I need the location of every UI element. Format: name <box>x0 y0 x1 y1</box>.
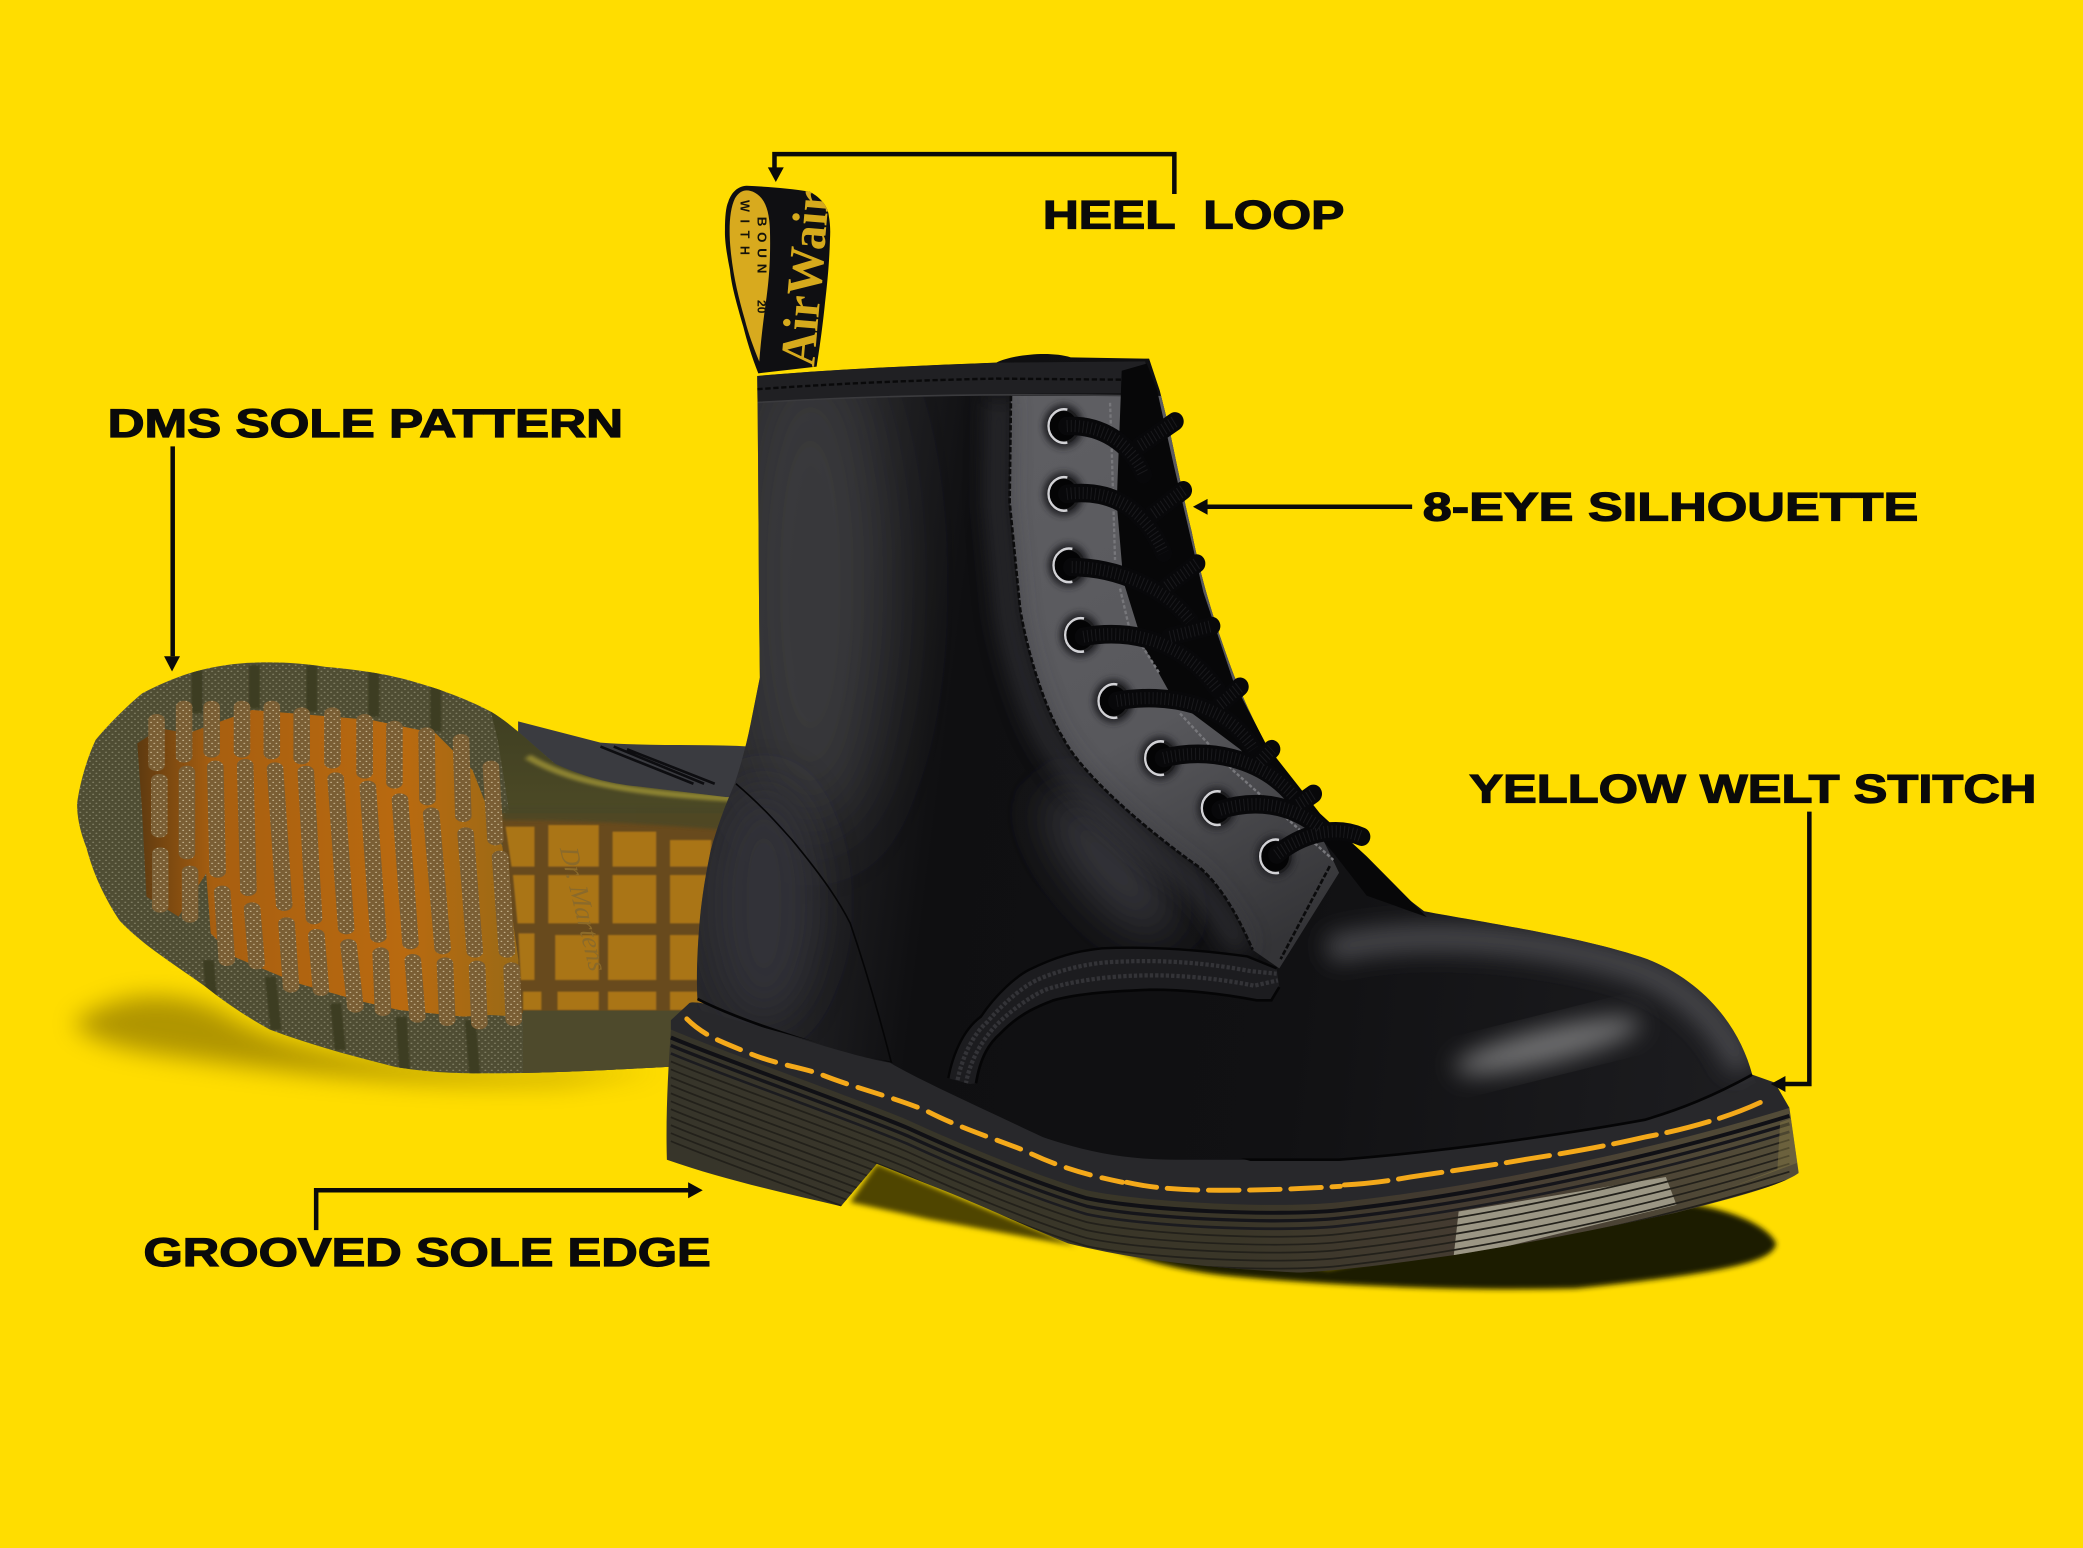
label: 8-eye silhouette: 8-EYE SILHOUETTE <box>1423 486 1918 530</box>
label: DMS sole pattern: DMS SOLE PATTERN <box>108 402 623 446</box>
heel counter highlight <box>711 784 817 1023</box>
triple toe-cap stitching band <box>947 948 1279 1087</box>
welt band <box>671 1002 1789 1205</box>
sole rim dot texture <box>77 662 553 1074</box>
arrow: 8-eye silhouette <box>1193 499 1412 515</box>
arrow: yellow welt stitch <box>1771 812 1809 1092</box>
embossed sole text: Dr. Martens <box>554 844 614 973</box>
inner strap number: 20 <box>754 300 768 314</box>
inner facing stitch <box>1110 403 1333 860</box>
translucent toe edge <box>1735 1119 1798 1186</box>
label: heel loop: HEEL LOOP <box>1043 193 1344 237</box>
inner yellow face <box>730 190 770 362</box>
arrow: grooved sole edge <box>316 1182 703 1230</box>
shadow under sole <box>73 996 664 1083</box>
eyelet facing panel <box>1010 396 1339 968</box>
yellow welt stitch <box>687 1019 1766 1190</box>
back boot behind sole <box>518 721 751 850</box>
dark tread channels <box>197 665 475 1075</box>
label: yellow welt stitch: YELLOW WELT STITCH <box>1469 767 2037 811</box>
eyelet dimples <box>1043 404 1295 878</box>
sole view: DMS tread pattern <box>77 662 729 1074</box>
toe highlight <box>1451 1006 1645 1085</box>
AirWair strap lettering: AirWair <box>769 187 840 368</box>
main boot <box>658 332 1813 1316</box>
laces <box>1067 421 1362 855</box>
facing stitch <box>1010 396 1253 950</box>
welt top seam <box>697 999 1752 1160</box>
tread lugs <box>157 707 514 1023</box>
collar band <box>757 361 1153 403</box>
inner strap lettering 2: BOUN <box>754 217 769 273</box>
heel counter seam <box>736 784 891 1063</box>
facing edge shade <box>998 396 1242 950</box>
shadow under boot <box>850 1164 1776 1289</box>
eyelets <box>1048 409 1290 873</box>
leg highlight <box>737 332 883 837</box>
label: grooved sole edge: GROOVED SOLE EDGE <box>143 1231 711 1275</box>
woven black strap <box>725 186 830 373</box>
arrow: DMS sole pattern <box>164 446 180 672</box>
orange inner sole <box>137 710 518 1017</box>
inner strap lettering: WITH <box>738 200 752 255</box>
tongue and lace gap <box>1043 364 1427 917</box>
quarter highlight <box>1033 782 1186 946</box>
sole highlight panel <box>1453 1177 1676 1259</box>
arrow: heel loop <box>768 154 1174 194</box>
sole side with grooves <box>666 1030 1799 1272</box>
vamp sheen <box>1328 938 1743 1069</box>
facing lower stitch <box>1281 866 1330 959</box>
heel loop <box>725 186 840 373</box>
sole waist and heel <box>491 712 729 1073</box>
heel breast <box>841 1164 878 1206</box>
leather upper <box>697 354 1752 1160</box>
